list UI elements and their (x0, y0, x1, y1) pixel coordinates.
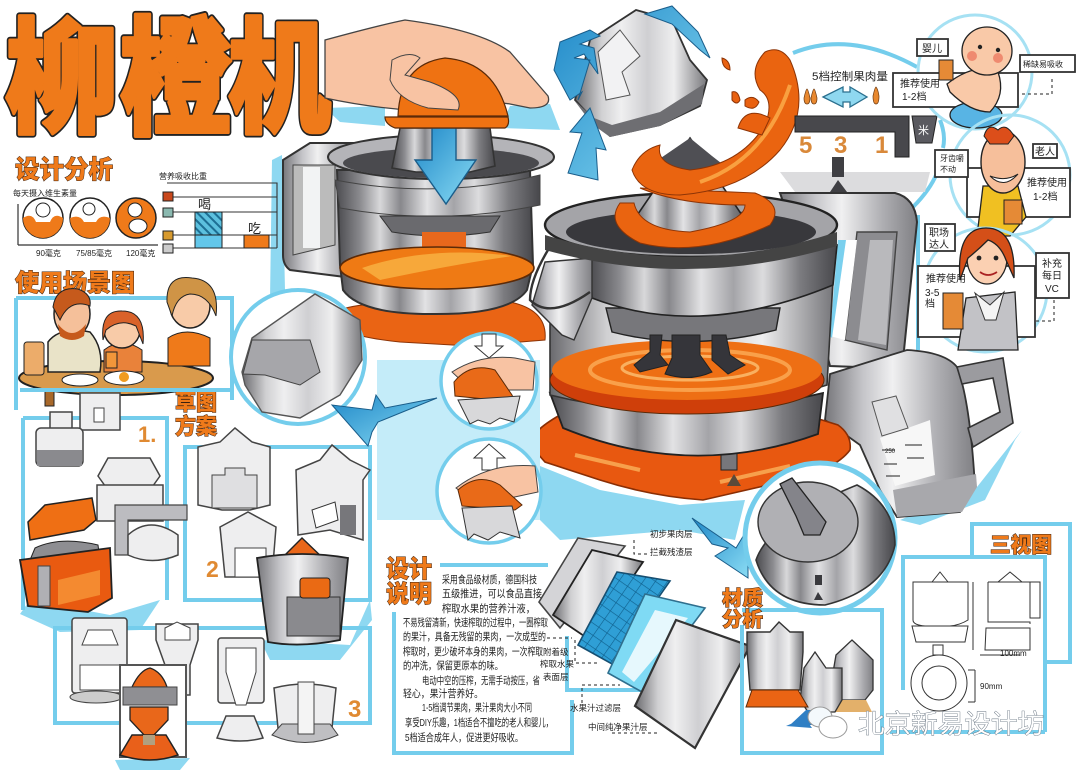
sketch group 1 (20, 393, 187, 612)
label: baby: 婴儿 (922, 43, 942, 55)
back juicer (283, 128, 554, 346)
lower band (550, 393, 823, 456)
juice control panel (795, 69, 937, 159)
labels: 附着级 (543, 647, 569, 657)
labels: 表面层 (543, 672, 569, 682)
woman figure (943, 228, 1018, 350)
panel: design description (386, 556, 640, 753)
circle (950, 115, 1070, 235)
text: gears (900, 77, 940, 103)
title: 机 (228, 11, 331, 149)
bar chart: drink versus eat: 吃 (248, 221, 261, 236)
hand (325, 20, 549, 112)
scale label (880, 420, 935, 486)
juice (340, 247, 534, 289)
blue marker shadows (20, 104, 1022, 770)
labels: 榨取水果 (540, 659, 575, 669)
chart label: servings: 每天摄入维生素量 (13, 188, 77, 198)
note: vitamin C: 补充 (1042, 257, 1062, 270)
frames (20, 390, 370, 723)
user: baby (893, 15, 1075, 129)
bar chart: drink versus eat: 喝 (198, 197, 211, 212)
title: 橙 (120, 9, 231, 152)
text: gears: 推荐使用 (1027, 176, 1067, 189)
connector (1022, 78, 1052, 94)
text: gears: 3-5 (925, 288, 940, 299)
panel: material analysis (722, 586, 882, 753)
labels: 中间纯净果汁层 (588, 722, 648, 732)
handle of main juicer (780, 193, 917, 368)
gear numbers: 5 (799, 132, 812, 159)
right product bracket (780, 44, 944, 368)
lid (242, 294, 362, 418)
gear numbers (799, 132, 888, 159)
text: gears: 1-2档 (1033, 190, 1057, 203)
paragraph: 轻心，果汁营养好。 (403, 687, 483, 700)
text: 北京新易设计坊 (858, 709, 1044, 739)
gear numbers: 1 (875, 132, 888, 159)
spindle (422, 232, 466, 251)
paragraph: 采用食品级材质，德国科技 (442, 573, 537, 586)
closeup: press down (441, 333, 537, 429)
hand on orange (325, 20, 549, 128)
heading: sketch plan line 2: 方案 (175, 414, 217, 439)
layer 4: light blue (608, 594, 705, 692)
knob (780, 478, 826, 535)
layer 2: glass (553, 550, 643, 640)
closeup: release (437, 439, 541, 543)
top view (911, 645, 967, 711)
paragraph (403, 573, 553, 744)
sketch group 2: 2 (206, 556, 219, 582)
blue outline (793, 44, 944, 350)
labels: 初步果肉层 (650, 529, 693, 539)
spout (532, 258, 592, 340)
upper band (590, 245, 837, 316)
panel: detail knob (692, 463, 895, 613)
connector (1036, 300, 1054, 321)
paragraph: 享受DIY乐趣，1档适合不擅吃的老人和婴儿， (405, 716, 553, 729)
illustration: family at table (19, 278, 216, 406)
icon: chat bubbles (786, 707, 847, 738)
measuring cup (872, 396, 908, 436)
pitcher: 250 (885, 449, 896, 455)
sketch group 3 (70, 618, 361, 760)
splash drops (722, 58, 770, 135)
senior figure (977, 127, 1026, 236)
pale blue panel (377, 360, 540, 520)
heading (386, 556, 432, 608)
heading: 三视图 (990, 534, 1052, 557)
note: few teeth: 不动 (940, 164, 956, 174)
layer 5: silver (635, 620, 750, 748)
paragraph: 不易残留清新，快速榨取的过程中，一圈榨取 (403, 616, 548, 629)
note: few teeth: 牙齿嚼 (940, 154, 964, 163)
orange base (322, 302, 545, 346)
dimensions: 90mm (980, 682, 1003, 691)
label: professional: 达人 (929, 239, 949, 251)
circle (923, 228, 1047, 352)
blue frame (394, 565, 640, 753)
label: professional: 职场 (929, 226, 949, 239)
sketch group 3: 3 (348, 696, 361, 723)
user: office worker (918, 224, 1069, 352)
chart labels: age groups: 120毫克 (126, 248, 155, 258)
juice control panel: 米 (918, 124, 929, 137)
rim (328, 135, 554, 179)
dimensions: 100mm (1000, 649, 1027, 658)
slider (780, 172, 930, 192)
pitcher body (825, 350, 975, 517)
frame (16, 298, 232, 410)
chart labels: age groups (36, 248, 155, 258)
pitcher (825, 350, 1013, 517)
text: gears: 档 (925, 297, 935, 310)
lid closeup circle (231, 290, 365, 424)
paragraph: 五级推进，可以食品直接 (442, 587, 542, 600)
down arrow (415, 128, 476, 204)
text: gears: 1-2档 (902, 90, 926, 103)
lower orange swirl (615, 188, 775, 248)
double arrow (823, 87, 867, 107)
heading (722, 586, 763, 631)
lid disc (758, 482, 858, 562)
panel: design analysis (13, 156, 277, 258)
handle (283, 143, 360, 277)
marks (814, 575, 823, 600)
label: elder: 老人 (1035, 145, 1055, 158)
recommended box (893, 73, 1018, 107)
band (893, 474, 977, 517)
label: baby (917, 39, 948, 56)
bar chart: drink versus eat (163, 183, 277, 253)
note: vitamin C: VC (1045, 284, 1059, 295)
slider marks (832, 157, 844, 177)
top reamer sketch (554, 6, 710, 180)
lid rim (545, 193, 837, 257)
chart label: ratio: 营养吸收比重 (159, 171, 207, 181)
upper orange swirl (632, 50, 799, 195)
title: 柳 (5, 10, 118, 149)
panel: three views (890, 524, 1070, 732)
text: gears (925, 272, 966, 310)
blue frame (742, 610, 882, 753)
metal loop (530, 250, 590, 308)
watermark (786, 707, 1044, 739)
strainer (606, 308, 780, 342)
note: vitamin C: 每日 (1042, 269, 1062, 282)
juicer small: center (790, 652, 842, 725)
orange base (530, 410, 850, 500)
sketch group 2 (198, 428, 370, 645)
labels: 拦截残渣层 (650, 547, 693, 557)
text: gears: 推荐使用 (900, 77, 940, 90)
note: easy absorb: 稀缺易吸收 (1023, 59, 1063, 69)
sketch group 1: 1. (138, 422, 156, 447)
dimensions (980, 649, 1027, 691)
lower dish (756, 485, 895, 605)
dark bar (795, 116, 909, 157)
dashed connectors (547, 540, 660, 733)
paragraph: 电动中空的压榨，无需手动按压，省 (422, 674, 540, 687)
heading: usage scene: 使用场景图 (15, 270, 135, 297)
user: senior (935, 115, 1070, 236)
label: professional (925, 224, 955, 251)
reamer (392, 128, 495, 172)
layer 3: blue mesh (578, 572, 670, 664)
thumb (390, 54, 459, 110)
chart labels: age groups: 75/85毫克 (76, 248, 112, 258)
title: 机 (228, 11, 331, 149)
labels: 水果汁过滤层 (570, 703, 621, 713)
text: gears: 推荐使用 (926, 272, 966, 285)
heading: 设计 (386, 556, 432, 583)
text: gears (1027, 176, 1067, 203)
arrow to lid (332, 395, 437, 446)
bowl (337, 170, 533, 314)
paragraph: 的果汁，具备无残留的果肉，一次成型的 (403, 630, 546, 643)
juicer small: right (830, 640, 873, 712)
arrow to detail (692, 518, 748, 578)
panel: usage scene (15, 270, 232, 439)
panel: sketch thumbnails (20, 390, 370, 760)
panel: lid closeup (231, 290, 541, 543)
heading: sketch plan: 草图 (175, 390, 217, 415)
heading: design analysis: 设计分析 (15, 156, 113, 184)
paragraph: 5档适合成年人，促进更好吸收。 (405, 731, 523, 744)
gear numbers: 3 (834, 132, 847, 159)
paragraph: 榨取水果的营养汁液， (442, 602, 535, 615)
blue frame (890, 524, 1070, 732)
note: few teeth (935, 150, 968, 177)
baby figure (939, 27, 1012, 128)
juicer small: left (746, 622, 808, 707)
circle frame (745, 463, 895, 613)
circle (918, 15, 1032, 129)
caption: 5档控制果肉量 (812, 69, 888, 83)
paragraph: 的冲洗，保留更原本的味。 (403, 659, 503, 672)
paragraph: 榨取时，更少破坏本身的果肉，一次榨取 (403, 645, 543, 658)
title: 橙 (120, 9, 231, 152)
orange dome (385, 58, 509, 128)
paragraph: 1-5档调节果肉，果汁果肉大小不同 (422, 701, 532, 714)
note: easy absorb (1020, 55, 1075, 72)
chart labels: age groups: 90毫克 (36, 248, 61, 258)
switch and triangle (721, 451, 741, 486)
layer 1: silver (539, 538, 625, 628)
note: vitamin C (1036, 253, 1069, 298)
title (5, 9, 331, 152)
main juicer (530, 50, 850, 500)
recommended box (967, 168, 1070, 217)
drop icons (804, 87, 879, 104)
heading: 材质 (722, 586, 763, 610)
reamer cone (575, 10, 707, 136)
front and side views (911, 572, 1040, 711)
legs (634, 335, 745, 378)
title: 柳 (5, 10, 118, 149)
handle (957, 358, 1013, 447)
dial icon (912, 116, 937, 143)
strainer (380, 216, 500, 236)
recommended box (918, 266, 1035, 337)
glass body (550, 280, 833, 410)
panel: exploded layers (539, 529, 750, 748)
heading: 说明 (386, 581, 432, 608)
rotation arrows (554, 6, 710, 180)
labels (540, 529, 693, 732)
juice (550, 346, 824, 414)
chart: orange circles (18, 198, 158, 245)
cone (627, 138, 752, 239)
heading: 分析 (722, 608, 763, 631)
